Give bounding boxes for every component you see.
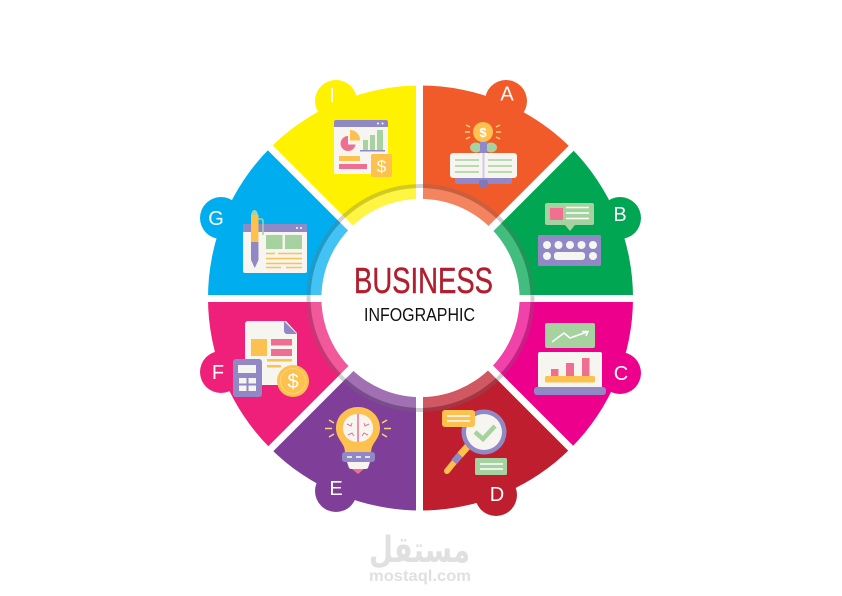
letter E: E [329, 478, 343, 500]
panel: G [200, 148, 350, 298]
icon: laptop with chart [534, 323, 606, 395]
panel: B [490, 148, 641, 298]
tab B [599, 197, 641, 239]
subtitle: INFOGRAPHIC [364, 305, 475, 325]
letter A: A [500, 84, 514, 106]
letter D: D [490, 484, 504, 506]
watermark url: mostaql.com [369, 568, 471, 585]
tab C [599, 352, 641, 394]
icon: book and coin plant [450, 122, 517, 188]
tab D [475, 474, 517, 516]
centre circle [322, 199, 520, 397]
wedge D [420, 368, 571, 510]
letter I: I [329, 85, 335, 107]
icon: dashboard window with charts [334, 120, 392, 177]
icon: dashboard window with charts: $ [377, 157, 387, 176]
icon: document, calculator and coin: $ [287, 371, 299, 393]
tab A [485, 80, 527, 122]
wedge F [208, 298, 350, 448]
title: BUSINESS [354, 260, 493, 301]
tab F [200, 351, 242, 393]
centre ring [308, 186, 532, 410]
wedge E [270, 368, 420, 510]
panel: A [420, 80, 571, 228]
panel: F [200, 298, 350, 448]
icon: browser window with pen [243, 210, 307, 273]
icon: document, calculator and coin [233, 321, 309, 397]
icon: magnifier with check [442, 410, 507, 475]
tab G [200, 197, 242, 239]
panel: C [490, 298, 641, 448]
tab I [315, 80, 357, 122]
letter B: B [613, 204, 627, 226]
wedge B [490, 148, 633, 298]
wedge A [420, 86, 571, 228]
wedge I [270, 86, 420, 228]
letter C: C [614, 363, 628, 385]
panel: E [270, 368, 420, 512]
wedge C [490, 298, 633, 448]
wedge G [208, 148, 350, 298]
watermark [369, 530, 471, 585]
panel: I [270, 80, 420, 228]
tab E [315, 470, 357, 512]
panel: D [420, 368, 571, 516]
icon: book and coin plant: $ [479, 125, 487, 140]
icon: keyboard and message [538, 203, 601, 266]
letter G: G [208, 208, 224, 230]
letter F: F [212, 362, 224, 384]
watermark arabic: مستقل [369, 530, 470, 571]
icon: light bulb with brain [325, 407, 391, 474]
